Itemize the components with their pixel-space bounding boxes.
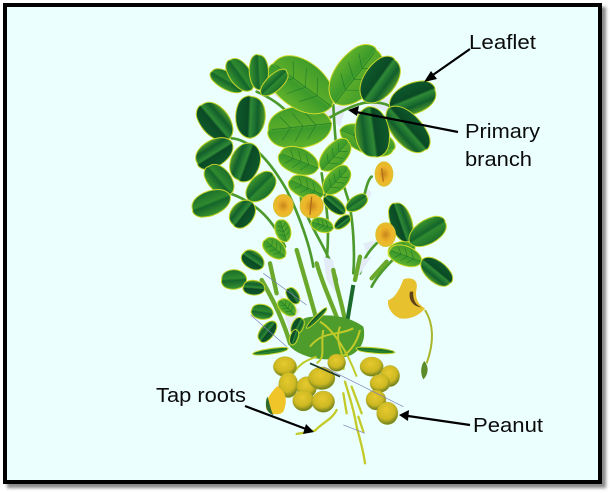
flowers (273, 162, 396, 247)
label: Leaflet: Leaflet (469, 32, 536, 54)
label: Tap roots: Tap roots (156, 385, 246, 407)
arrow: Primary branch (348, 106, 458, 132)
central tangle (293, 322, 360, 377)
label: branch: branch (465, 149, 532, 171)
lower plant with peanuts and roots (221, 241, 457, 463)
dark leaves (207, 64, 248, 98)
detached peanut shell (266, 386, 286, 414)
peanuts (273, 354, 400, 425)
label: Primary: Primary (465, 121, 540, 143)
detached yellow flower with stalk (388, 278, 432, 379)
lower leaves (238, 246, 268, 274)
upper plant foliage (188, 36, 452, 287)
label: Peanut: Peanut (473, 415, 543, 437)
arrow: Leaflet (424, 49, 470, 82)
thin roots and lines (251, 273, 403, 433)
arrow: Tap roots (245, 406, 314, 434)
arrow: Peanut (399, 410, 470, 425)
roots (297, 382, 365, 463)
lower stems (262, 250, 387, 343)
stems (232, 92, 410, 287)
light leaves (335, 117, 399, 162)
central leaf cluster (289, 315, 364, 359)
peanut plant illustration (188, 36, 457, 463)
